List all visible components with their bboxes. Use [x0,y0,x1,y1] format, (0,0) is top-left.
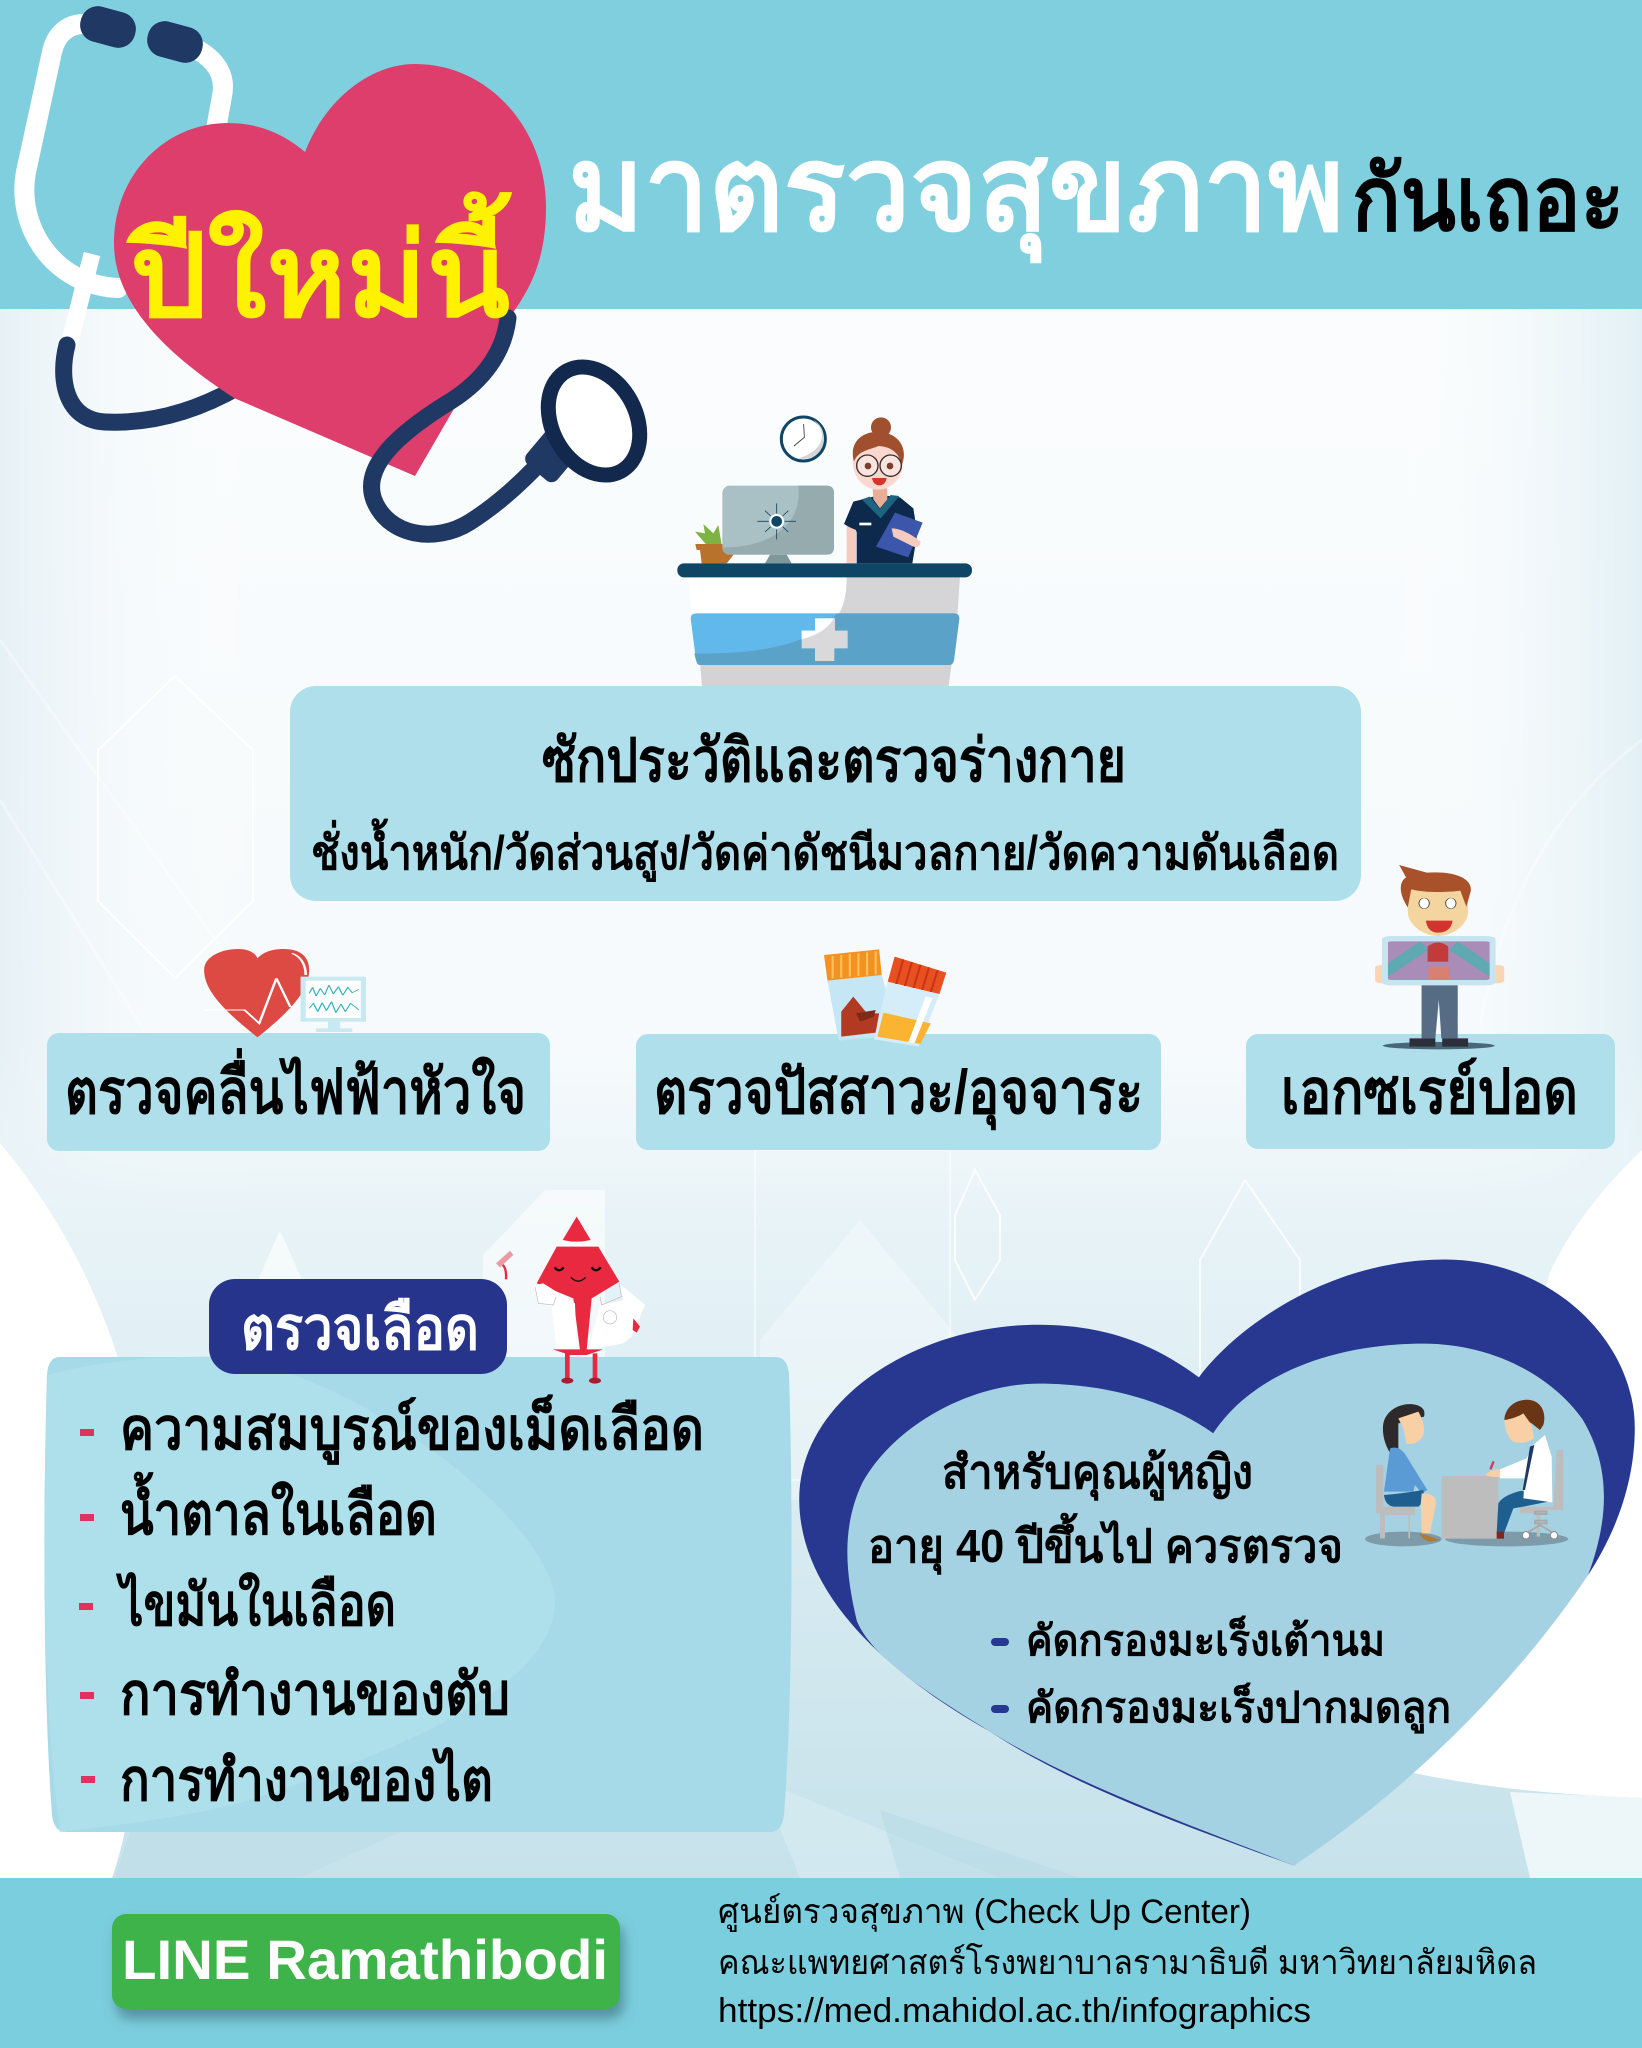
illustration: reception desk [677,417,972,693]
list: blood tests: ไขมันในเลือด [115,1571,396,1638]
bullets [991,1638,1009,1713]
list: blood tests: ความสมบูรณ์ของเม็ดเลือด [120,1394,704,1465]
icon: clock [781,417,825,461]
icon: stethoscope tube over heart [372,318,552,534]
icon: blood drop nurse mascot [496,1217,645,1384]
text: women's screening: สำหรับคุณผู้หญิง [942,1446,1253,1501]
text: contact details: https://med.mahidol.ac.th/infographics [718,1992,1311,2030]
icon: nurse [844,417,923,563]
text: women's screening: อายุ 40 ปีขึ้นไป ควรตรวจ [868,1512,1343,1575]
icon: monitor [722,486,834,563]
panel: ECG [47,1033,550,1151]
button: LINE Ramathibodi [112,1914,620,2009]
label: blood test pill [209,1279,507,1374]
illustrations: test icons [204,865,1504,1049]
bottom footer band [0,1878,1642,2048]
text: women's screening: คัดกรองมะเร็งเต้านม [1026,1615,1385,1664]
text: measurements: ชั่งน้ำหนัก/วัดส่วนสูง/วัดค่าดัชนีมวลกาย/วัดความดันเลือด [311,818,1339,883]
icon: desk [677,563,972,693]
icon: chest piece [522,351,658,491]
title: มาตรวจสุขภาพ [568,122,1344,264]
heading: new year: ปีใหม่นี้ [125,191,513,341]
list: blood tests: การทำงานของไต [120,1747,493,1813]
text: women's screening [868,1446,1451,1734]
icon: specimen bottles [824,949,946,1047]
button: LINE Ramathibodi: LINE Ramathibodi [122,1928,608,1991]
list: blood tests: การทำงานของตับ [120,1662,510,1727]
panel: urine and stool: ตรวจปัสสาวะ/อุจจาระ [654,1058,1143,1130]
icon: plant [695,524,733,563]
text: contact details [718,1893,1537,2030]
icon: man with x-ray [1375,865,1504,1049]
list: blood tests: น้ำตาลในเลือด [120,1472,437,1547]
icon: stethoscope earpieces [76,2,207,67]
illustration: patient and doctor [1365,1400,1568,1546]
label: blood test pill: ตรวจเลือด [241,1295,479,1362]
heading: ซักประวัติและตรวจร่างกาย [542,727,1126,794]
list: blood tests [115,1394,704,1813]
text: contact details: ศูนย์ตรวจสุขภาพ (Check Up Center) [718,1893,1251,1932]
panel: history and physical [290,686,1361,901]
panel: chest x-ray: เอกซเรย์ปอด [1281,1057,1578,1127]
icon: big pink heart [114,64,546,476]
text: women's screening: คัดกรองมะเร็งปากมดลูก [1026,1682,1451,1734]
text: contact details: คณะแพทยศาสตร์โรงพยาบาลรามาธิบดี มหาวิทยาลัยมหิดล [718,1943,1537,1982]
panel: chest x-ray [1246,1034,1615,1149]
list dash markers [79,1429,95,1783]
panel: blood tests [44,1357,792,1832]
stethoscope tubes [24,24,240,422]
icon: heart and ECG monitor [204,949,366,1037]
panel: urine and stool [636,1034,1161,1150]
panel: women's screening heart [799,1259,1635,1866]
panel: ECG: ตรวจคลื่นไฟฟ้าหัวใจ [65,1048,526,1127]
top header band [0,0,1642,309]
